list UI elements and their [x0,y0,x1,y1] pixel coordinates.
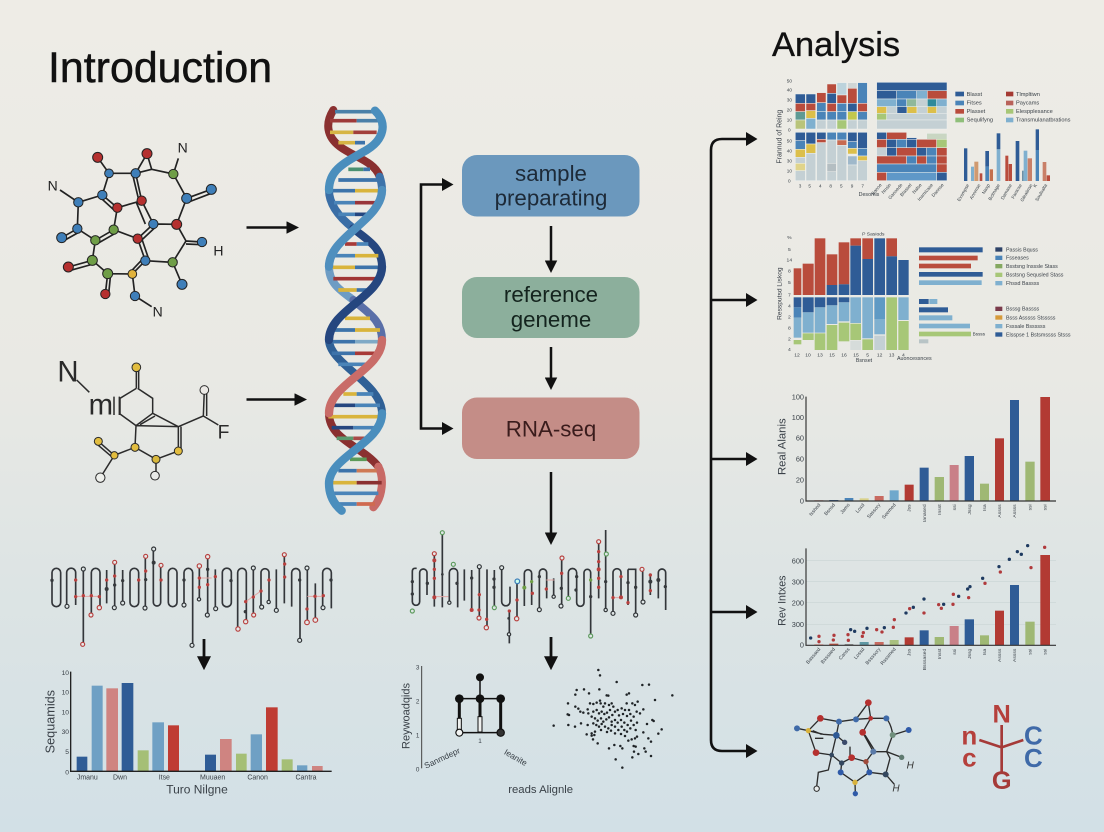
analysis panel 1: stacked heatmaps and bars: Exsmpse [956,183,970,202]
arrow: sample to reference [550,226,552,263]
analysis panel 4: bar chart with scatter overlay: 600 [792,556,804,565]
analysis panel 3: bar chart: Loxd [855,502,866,515]
analysis panel 1: stacked heatmaps and bars: Fanicse [1010,183,1023,200]
analysis panel 1: stacked heatmaps and bars: Frannud of Reing [776,110,783,164]
analysis panel 1: stacked heatmaps and bars: Inamicase [917,182,934,202]
analysis panel 4: bar chart with scatter overlay: Rev Intxes [776,575,788,626]
network diagram: reads alignment: 2 [416,698,420,705]
network diagram: reads alignment: Reywoadqids [400,683,412,749]
analysis panel 1: stacked heatmaps and bars: 0 [788,128,791,133]
bar chart: Turo Nilgne: 10 [62,709,69,716]
analysis panel 1: stacked heatmaps and bars: Desomis [859,192,880,198]
arrow: track to bar chart [203,639,205,659]
analysis panel 3: bar chart: Ianased [922,504,928,522]
analysis panel 1: stacked heatmaps and bars: 5 [808,183,811,188]
analysis panel 1: stacked heatmaps and bars: Elespplesance [1016,109,1053,115]
arrow: track to network and scatter [550,637,552,659]
analysis panel 1: stacked heatmaps and bars: Nalse [911,182,923,195]
analysis panel 1: stacked heatmaps and bars: Dannse [931,182,945,198]
analysis panel 1: stacked heatmaps and bars: Soulsalta [1034,183,1048,202]
icon: N C G structure label: C [1024,720,1043,750]
flow box: RNA-seq: RNA-seq [506,416,596,442]
icon: N C G structure label: G [992,767,1012,795]
analysis panel 1: stacked heatmaps and bars: Blasst [967,92,982,98]
icon: coloured molecule: N [48,178,58,194]
analysis panel 4: bar chart with scatter overlay: Bassaed [805,647,822,665]
analysis panel 4: bar chart with scatter overlay: Canss [838,646,852,661]
analysis panel 3: bar chart: 20 [796,475,804,484]
bar chart: Turo Nilgne [44,670,332,796]
analysis panel 2: stacked columns and horizontal bars: 10 [805,353,811,359]
analysis panel 3: bar chart: Real Alanis [776,418,788,475]
analysis panel 2: stacked columns and horizontal bars: 2 [788,337,791,343]
analysis panel 4: bar chart with scatter overlay: Bssssory [865,646,883,666]
analysis panel 2: stacked columns and horizontal bars: 13 [817,353,823,359]
bar chart: Turo Nilgne: Sequamids [44,690,58,753]
title: Analysis: Analysis [772,26,900,64]
analysis panel 1: stacked heatmaps and bars: 10 [787,168,792,173]
analysis panel 4: bar chart with scatter overlay: Jss [907,648,913,656]
analysis panel 2: stacked columns and horizontal bars: 7 [788,292,791,298]
analysis panel 1: stacked heatmaps and bars: Nasp [981,183,991,195]
analysis panel 2: stacked columns and horizontal bars: 15 [853,353,859,359]
analysis panel 3: bar chart: 60 [796,434,804,443]
bar chart: Turo Nilgne: Canon [247,774,268,781]
analysis panel 1: stacked heatmaps and bars: 0 [788,178,791,183]
read alignment track, centre [410,530,667,643]
analysis panel 1: stacked heatmaps and bars: Sequlifyng [967,118,993,124]
bar chart: Turo Nilgne: 30 [62,729,69,736]
analysis panel 2: stacked columns and horizontal bars: 8 [788,325,791,331]
analysis panel 3: bar chart: Jams [839,502,852,515]
analysis panel 1: stacked heatmaps and bars: Banoe [870,182,883,196]
analysis panel 2: stacked columns and horizontal bars: 5 [788,280,791,286]
icon: yellow molecule: F [218,422,230,443]
bar chart: Turo Nilgne: 10 [62,670,69,677]
analysis panel 1: stacked heatmaps and bars: 10 [787,118,792,123]
analysis panel 1: stacked heatmaps and bars: Transmulanatbrations [1016,118,1071,124]
bar chart: Turo Nilgne: Dwn [113,774,127,781]
analysis panel 2: stacked columns and horizontal bars [776,231,1071,364]
analysis panel 3: bar chart: ssi [1043,504,1049,510]
flow box: RNA-seq [462,398,640,459]
arrow: reference to RNA-seq [550,347,552,380]
analysis panel 1: stacked heatmaps and bars: 9 [851,183,854,188]
flow box: sample preparating: preparating [495,186,607,210]
DNA double helix [328,110,383,511]
analysis panel 2: stacked columns and horizontal bars: 4 [788,347,791,353]
analysis panel 4: bar chart with scatter overlay: Bsssased [922,648,928,670]
analysis panel 1: stacked heatmaps and bars: 30 [787,98,792,103]
analysis panel 1: stacked heatmaps and bars: Plasset [967,109,986,115]
analysis panel 3: bar chart: 100 [792,393,804,402]
arrow: RNA-seq to reads [550,472,552,535]
analysis panel 2: stacked columns and horizontal bars: Elsspse 1 Bstsmssss Stsss [1006,333,1071,339]
analysis panel 2: stacked columns and horizontal bars: P Sasiods [862,231,885,237]
bar chart: Turo Nilgne: 10 [62,689,69,696]
analysis panel 1: stacked heatmaps and bars: 3 [799,183,802,188]
analysis panel 2: stacked columns and horizontal bars: 15 [829,353,835,359]
flow box: sample preparating: sample [515,161,587,186]
analysis panel 2: stacked columns and horizontal bars: 4 [788,304,791,310]
flow box: reference geneme: reference [504,282,598,307]
analysis panel 2: stacked columns and horizontal bars: Fsseases [1006,256,1029,262]
arrow: molecule to DNA [246,226,289,229]
icon: analysis molecule: H [892,784,900,795]
analysis panel 3: bar chart: Sassory [866,502,883,520]
analysis panel 2: stacked columns and horizontal bars: Auoncessnces [897,356,932,362]
icon: analysis molecule: H [907,760,915,771]
bar chart: Turo Nilgne: Muuaen [200,774,225,781]
analysis panel 1: stacked heatmaps and bars: 8 [829,183,832,188]
analysis panel 4: bar chart with scatter overlay [776,546,1056,670]
analysis panel 3: bar chart: Jssg [967,504,973,515]
analysis panel 2: stacked columns and horizontal bars: Passis Bquss [1006,247,1038,253]
analysis panel 2: stacked columns and horizontal bars: 12 [794,353,800,359]
analysis panel 4: bar chart with scatter overlay: Assss [1012,648,1018,662]
icon: N C G structure label [961,700,1043,795]
analysis panel 2: stacked columns and horizontal bars: Bsssg Bassss [1006,307,1039,313]
analysis panel 2: stacked columns and horizontal bars: Ressputsd Liskog [776,267,783,320]
analysis panel 2: stacked columns and horizontal bars: 8 [788,268,791,274]
bracket arrows to analysis panels [711,132,758,758]
title: Introduction: Introduction [48,44,272,92]
network diagram: reads alignment [400,665,573,796]
bar chart: Turo Nilgne: Itse [159,774,170,781]
analysis panel 2: stacked columns and horizontal bars: 13 [889,353,895,359]
analysis panel 2: stacked columns and horizontal bars: Fhssd Bassss [1006,281,1039,287]
analysis panel 4: bar chart with scatter overlay: 0 [800,641,804,650]
icon: yellow molecule: m [89,388,113,421]
analysis panel 1: stacked heatmaps and bars: Tlmpltiwn [1016,92,1040,98]
icon: N C G structure label: C [1024,743,1043,773]
icon: coloured molecule: H [213,243,223,259]
analysis panel 1: stacked heatmaps and bars: Annmse [969,183,982,200]
bar chart: Turo Nilgne: 5 [65,749,69,756]
analysis panel 4: bar chart with scatter overlay: ssi [952,649,958,655]
analysis panel 4: bar chart with scatter overlay: 200 [792,598,804,607]
bar chart: Turo Nilgne: Jmanu [77,774,98,781]
network diagram: reads alignment: reads Alignle [508,784,573,796]
analysis panel 1: stacked heatmaps and bars: Damase [1000,183,1013,201]
analysis panel 2: stacked columns and horizontal bars: Bsnset [856,358,873,364]
flow box: reference geneme: geneme [511,307,591,332]
analysis panel 4: bar chart with scatter overlay: Jssg [967,648,973,659]
bar chart: Turo Nilgne: 0 [65,769,69,776]
arrow: feedback bracket into sample preparing and RNA-seq [421,178,454,435]
analysis panel 2: stacked columns and horizontal bars: 5 [788,247,791,253]
analysis panel 3: bar chart: 0 [800,496,804,505]
analysis panel 3: bar chart: 60 [796,454,804,463]
arrow: second molecule to DNA [246,398,297,401]
icon: coloured molecule [48,139,223,320]
analysis panel 3: bar chart: Bsnsd [823,502,837,517]
bar chart: Turo Nilgne: Turo Nilgne [166,782,228,796]
analysis panel 3: bar chart: Isshed [808,502,822,518]
analysis panel 3: bar chart: Assss [997,504,1003,518]
analysis panel 3: bar chart: Isa [982,504,988,511]
analysis panel 1: stacked heatmaps and bars: Blasset [899,182,913,197]
analysis panel 1: stacked heatmaps and bars [776,79,1071,203]
analysis panel 3: bar chart: Assss [1012,504,1018,518]
flow box: sample preparating [462,155,640,216]
icon: analysis molecule [794,699,915,796]
read alignment track, left [50,547,333,647]
analysis panel 4: bar chart with scatter overlay: Insst [937,648,943,659]
analysis panel 3: bar chart: 100 [792,413,804,422]
analysis panel 2: stacked columns and horizontal bars: 2 [788,315,791,321]
flow box: reference geneme [462,277,640,338]
analysis panel 2: stacked columns and horizontal bars: 4 [902,353,905,359]
analysis panel 1: stacked heatmaps and bars: 20 [787,108,792,113]
analysis panel 1: stacked heatmaps and bars: 40 [787,88,792,93]
analysis panel 1: stacked heatmaps and bars: 4 [819,183,822,188]
analysis panel 1: stacked heatmaps and bars: Paycams [1016,101,1039,107]
analysis panel 1: stacked heatmaps and bars: Ganoede [887,182,904,200]
analysis panel 1: stacked heatmaps and bars: Bclmage [987,183,1001,201]
bar chart: Turo Nilgne: Cantra [296,774,317,781]
icon: coloured molecule: N [178,139,188,155]
analysis panel 1: stacked heatmaps and bars: 5 [840,183,843,188]
analysis panel 3: bar chart: Insst [937,504,943,515]
network diagram: reads alignment: 3 [416,665,420,672]
analysis panel 2: stacked columns and horizontal bars: 16 [841,353,847,359]
analysis panel 3: bar chart: ssi [952,504,958,510]
icon: N C G structure label: N [993,700,1011,728]
icon: N C G structure label: c [962,742,977,772]
network diagram: reads alignment: Ieanite [503,747,529,768]
analysis panel 1: stacked heatmaps and bars: 30 [787,159,792,164]
scatter plot [554,670,672,768]
analysis panel 3: bar chart: Seemed [881,502,898,521]
analysis panel 2: stacked columns and horizontal bars: Bsss Asssss Stsssss [1006,315,1056,321]
analysis panel 1: stacked heatmaps and bars: 40 [787,149,792,154]
network diagram: reads alignment: 1 [478,738,482,745]
analysis panel 4: bar chart with scatter overlay: 300 [792,577,804,586]
analysis panel 2: stacked columns and horizontal bars: Fsssale Bssssss [1006,324,1046,330]
icon: N C G structure label: n [961,720,977,750]
analysis panel 3: bar chart: ssi [1028,504,1034,510]
analysis panel 4: bar chart with scatter overlay: Lossd [853,647,866,661]
analysis panel 4: bar chart with scatter overlay: ssi [1043,649,1049,655]
analysis panel 4: bar chart with scatter overlay: 300 [792,620,804,629]
network diagram: reads alignment: 1 [416,732,420,739]
analysis panel 1: stacked heatmaps and bars: Fitses [967,101,982,107]
analysis panel 3: bar chart: Jss [907,504,913,512]
analysis panel 2: stacked columns and horizontal bars: 14 [787,258,792,264]
analysis panel 4: bar chart with scatter overlay: ssi [1028,649,1034,655]
analysis panel 4: bar chart with scatter overlay: Isa [982,648,988,655]
analysis panel 4: bar chart with scatter overlay: Rsssmed [880,647,898,667]
analysis panel 2: stacked columns and horizontal bars: Bsstsng Insssle Stass [1006,264,1058,270]
analysis panel 1: stacked heatmaps and bars: Nnsin [881,182,892,195]
icon: coloured molecule: N [153,304,163,320]
icon: yellow molecule: N [57,356,79,389]
analysis panel 2: stacked columns and horizontal bars: Bssss [973,332,986,337]
analysis panel 1: stacked heatmaps and bars: 7 [861,183,864,188]
analysis panel 4: bar chart with scatter overlay: Assss [997,648,1003,662]
analysis panel 2: stacked columns and horizontal bars: Bsstsng Sequsled Stass [1006,273,1064,279]
analysis panel 2: stacked columns and horizontal bars: 12 [877,353,883,359]
network diagram: reads alignment: 0 [416,766,420,773]
analysis panel 1: stacked heatmaps and bars: K [1032,182,1039,188]
analysis panel 1: stacked heatmaps and bars: Gleatinse [1019,183,1034,203]
network diagram: reads alignment: Sanmdepr [423,745,462,771]
analysis panel 1: stacked heatmaps and bars: 50 [787,138,792,143]
analysis panel 4: bar chart with scatter overlay: Bsssaed [820,647,837,665]
analysis panel 2: stacked columns and horizontal bars: % [787,235,792,241]
icon: yellow molecule [57,356,230,482]
analysis panel 3: bar chart [776,393,1056,522]
analysis panel 2: stacked columns and horizontal bars: 5 [866,353,869,359]
analysis panel 1: stacked heatmaps and bars: 50 [787,79,792,84]
